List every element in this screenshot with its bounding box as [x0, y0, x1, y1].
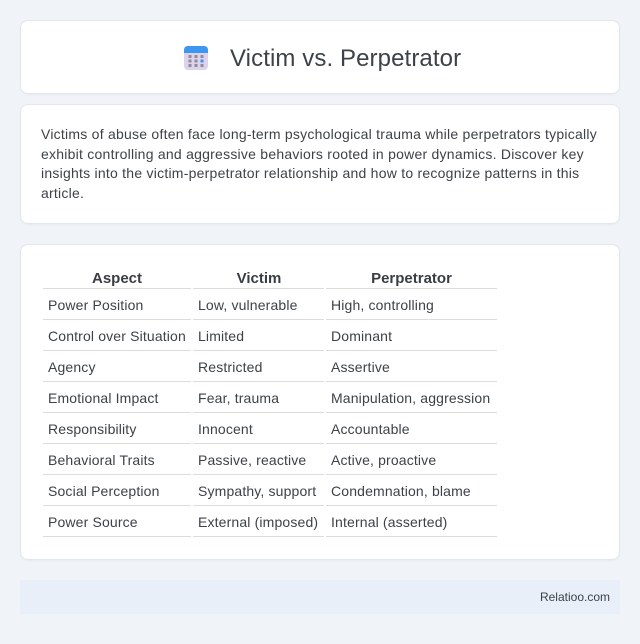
row: control over situation: Control over Situation: [48, 328, 186, 344]
row: emotional impact: Emotional Impact: [48, 390, 159, 406]
row: behavioral traits: Active, proactive: [331, 452, 436, 468]
row: social perception: Social Perception: [48, 483, 160, 499]
panel: comparison table card: [20, 244, 620, 560]
text block: introduction: Victims of abuse often face long-term psychological trauma while perpetrators typically: [41, 126, 597, 142]
footer text: site name: Relatioo.com: [540, 590, 610, 604]
row: emotional impact: Fear, trauma: [198, 390, 279, 406]
text block: introduction: insights into the victim-perpetrator relationship and how to recognize patterns in this: [41, 165, 579, 181]
footer bar: [20, 580, 620, 614]
row: agency: [43, 359, 497, 382]
row: agency: Agency: [48, 359, 96, 375]
row: power position: [43, 297, 497, 320]
row: responsibility: Accountable: [331, 421, 410, 437]
row: emotional impact: [43, 390, 497, 413]
text block: introduction: [41, 126, 597, 200]
row: power position: Power Position: [48, 297, 143, 313]
row: responsibility: Responsibility: [48, 421, 136, 437]
row: behavioral traits: Behavioral Traits: [48, 452, 155, 468]
row: power source: External (imposed): [198, 514, 318, 530]
row: agency: Restricted: [198, 359, 263, 375]
row: control over situation: Dominant: [331, 328, 392, 344]
row: social perception: Condemnation, blame: [331, 483, 471, 499]
table header row: Perpetrator: [371, 270, 452, 287]
row: behavioral traits: [43, 452, 497, 475]
row: behavioral traits: Passive, reactive: [198, 452, 306, 468]
title: Victim vs. Perpetrator: [230, 45, 461, 72]
row: power position: High, controlling: [331, 297, 434, 313]
row: social perception: [43, 483, 497, 506]
table header row: Aspect: [92, 270, 142, 287]
row: power source: Internal (asserted): [331, 514, 447, 530]
row: power source: [43, 514, 497, 537]
table header row: [43, 270, 497, 289]
row: social perception: Sympathy, support: [198, 483, 316, 499]
row: responsibility: [43, 421, 497, 444]
table header row: Victim: [237, 270, 281, 287]
row: power position: Low, vulnerable: [198, 297, 298, 313]
row: control over situation: Limited: [198, 328, 244, 344]
icon: calendar: [184, 46, 208, 70]
row: control over situation: [43, 328, 497, 351]
panel: title card: [20, 20, 620, 94]
row: emotional impact: Manipulation, aggression: [331, 390, 490, 406]
row: responsibility: Innocent: [198, 421, 253, 437]
row: power source: Power Source: [48, 514, 138, 530]
row: agency: Assertive: [331, 359, 390, 375]
text block: introduction: article.: [41, 184, 84, 200]
panel: introduction card: [20, 104, 620, 224]
comparison table: [43, 270, 497, 537]
text block: introduction: exhibit controlling and aggressive behaviors rooted in power dynamics. Discover key: [41, 146, 584, 162]
